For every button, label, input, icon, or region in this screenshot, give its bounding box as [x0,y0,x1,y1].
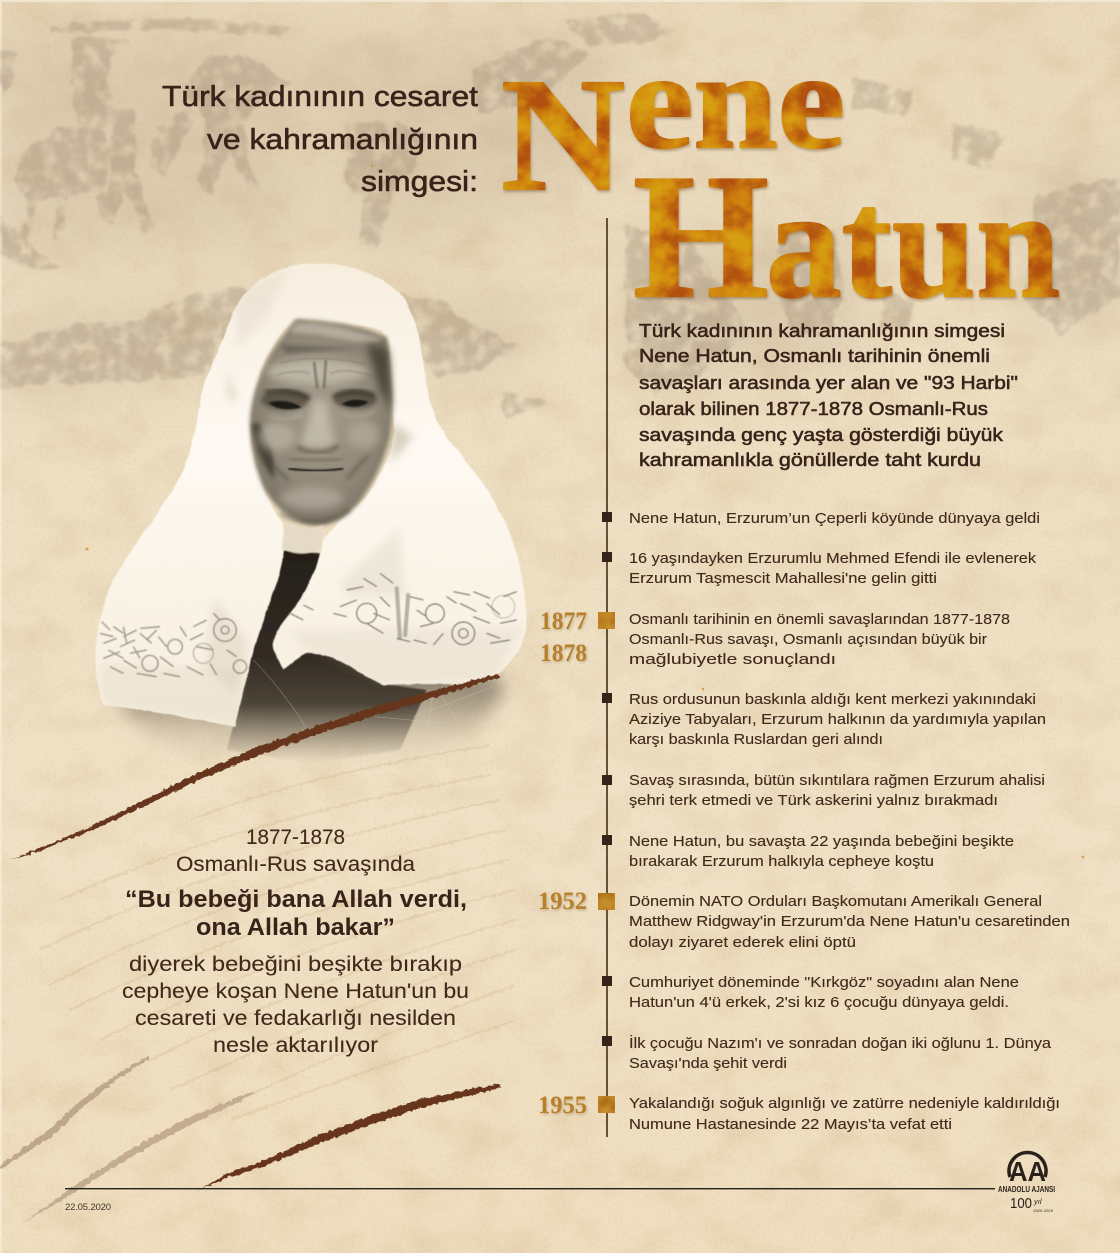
brush stroke: pale left [0,1056,149,1170]
portrait: veil shading [100,270,523,723]
timeline entry: 1952 [538,888,1070,951]
portrait: Nene Hatun [95,263,527,766]
timeline: vertical line [606,218,608,1137]
timeline entry: Aziziye: Aziziye Tabyaları, Erzurum halkının da yardımıyla yapılan [629,711,1046,728]
logo: Anadolu Ajansı: 1920-2020 [1033,1208,1054,1213]
logo: Anadolu Ajansı [998,1152,1055,1213]
portrait: right embroidery [290,573,517,645]
timeline entry: 1955: 1955 [538,1092,587,1119]
timeline entry: marriage: Erzurum Taşmescit Mahallesi'ne gelin gitti [629,570,937,587]
quote block: “Bu bebeği bana Allah verdi, [125,886,467,913]
quote block [122,825,469,1057]
quote block: 1877-1878 [246,825,345,849]
intro paragraph: olarak bilinen 1877-1878 Osmanlı-Rus [639,398,988,419]
heading: intro line [162,81,478,198]
timeline entry: people stayed: şehri terk etmedi ve Türk askerini yalnız bırakmadı [629,792,998,809]
title: Nene Hatun: N [501,46,625,225]
portrait: mouth [288,468,343,471]
heading: intro line: simgesi: [361,166,478,198]
intro paragraph: savaşları arasında yer alan ve "93 Harbi" [639,372,1018,393]
timeline entry: sons: Savaşı'nda şehit verdi [629,1055,787,1072]
heading: intro line: ve kahramanlığının [207,124,478,156]
title: Nene Hatun [501,24,1060,335]
title: Nene Hatun: H [633,137,769,335]
brush stroke: pale middle [22,1091,254,1224]
intro paragraph: savaşında genç yaşta gösterdiği büyük [639,424,1004,445]
timeline entry: to the front: bırakarak Erzurum halkıyla cepheye koştu [629,853,934,870]
timeline entry: 1955: Yakalandığı soğuk algınlığı ve zatürre nedeniyle kaldırıldığı [629,1095,1060,1112]
quote block: cepheye koşan Nene Hatun'un bu [122,979,469,1003]
timeline entry: sons: İlk çocuğu Nazım'ı ve sonradan doğan iki oğlunu 1. Dünya [629,1034,1052,1052]
timeline entry: sons [602,1034,1052,1072]
portrait: collar [282,523,323,554]
logo: Anadolu Ajansı: 100 [1010,1195,1032,1212]
timeline entry: 1877-1878: Osmanlı tarihinin en önemli savaşlarından 1877-1878 [629,611,1010,628]
portrait: nose [300,400,335,448]
date: 22.05.2020 [65,1202,111,1213]
speckles [86,165,1084,858]
timeline entry: Aziziye: Rus ordusunun baskınla aldığı kent merkezi yakınındaki [629,691,1036,708]
timeline entry: 1955: Numune Hastanesinde 22 Mayıs’ta vefat etti [629,1116,952,1133]
timeline entry: 1877-1878: 1877 [540,608,587,635]
heading: intro line: Türk kadınının cesaret [162,81,478,113]
timeline entry: 1877-1878: 1878 [540,640,587,667]
logo: Anadolu Ajansı: yıl [1033,1197,1042,1206]
title: Nene Hatun: ene [626,24,845,177]
timeline entry: marriage [602,550,1036,587]
timeline entry: 1877-1878: mağlubiyetle sonuçlandı [629,651,836,668]
logo: Anadolu Ajansı: AA [1009,1156,1046,1187]
timeline entry: marriage: 16 yaşındayken Erzurumlu Mehmed Efendi ile evlenerek [629,550,1036,567]
timeline entry: 1952: Dönemin NATO Orduları Başkomutanı Amerikalı General [629,893,1042,910]
background: faded battle sketch [0,12,1120,418]
background: soft washes behind the sketch [0,30,1120,400]
portrait: forehead highlight [267,359,367,384]
portrait: cheeks [258,423,295,451]
quote block: ona Allah bakar” [196,914,395,941]
timeline entry: people stayed [602,772,1045,809]
intro paragraph: kahramanlıkla gönüllerde taht kurdu [639,449,981,470]
portrait: body fading into paper [117,665,504,766]
logo: Anadolu Ajansı: ANADOLU AJANSI [998,1184,1055,1194]
timeline entry: people stayed: Savaş sırasında, bütün sıkıntılara rağmen Erzurum ahalisi [629,772,1045,789]
timeline entry: 1952: 1952 [538,888,587,915]
portrait: left embroidery [100,613,247,677]
intro paragraph: Türk kadınının kahramanlığının simgesi [639,320,1005,341]
timeline entry: birth: Nene Hatun, Erzurum’un Çeperli köyünde dünyaya geldi [629,510,1040,527]
timeline entry: Aziziye: karşı baskınla Ruslardan geri alındı [629,731,883,748]
background: faint pen lines behind quote [40,745,515,1120]
timeline entry: surname [602,974,1019,1011]
brush stroke: lower brown [197,1084,500,1191]
timeline entry: surname: Hatun'un 4'ü erkek, 2'si kız 6 çocuğu dünyaya geldi. [629,994,1009,1011]
portrait: eyebrows and eyes [265,391,375,398]
quote block: Osmanlı-Rus savaşında [176,852,415,876]
title: Nene Hatun: atun [766,157,1060,330]
timeline entry: 1877-1878 [540,608,1010,668]
footer rule [65,1188,995,1189]
intro paragraph [639,320,1018,470]
portrait: pale creases on dress [253,660,493,760]
brush stroke: upper brown [10,674,500,860]
timeline entry: Aziziye [602,691,1046,748]
portrait: white veil [95,263,527,727]
portrait: face [250,319,392,526]
quote block: nesle aktarılıyor [213,1033,378,1057]
timeline entry: 1877-1878: Osmanlı-Rus savaşı, Osmanlı açısından büyük bir [629,631,987,648]
timeline entry: to the front: Nene Hatun, bu savaşta 22 yaşında bebeğini beşikte [629,833,1014,850]
intro paragraph: Nene Hatun, Osmanlı tarihinin önemli [639,345,990,366]
timeline entry: 1955 [538,1092,1060,1133]
timeline entry: to the front [602,833,1014,870]
portrait: dark dress [227,550,427,763]
quote block: cesareti ve fedakarlığı nesilden [135,1006,456,1030]
quote block: diyerek bebeğini beşikte bırakıp [129,952,462,976]
portrait: eye sockets [261,390,309,410]
timeline entry: surname: Cumhuriyet döneminde "Kırkgöz" soyadını alan Nene [629,974,1019,991]
timeline entry: 1952: Matthew Ridgway'in Erzurum'da Nene Hatun'u cesaretinden [629,913,1070,930]
timeline entry: 1952: dolayı ziyaret ederek elini öptü [629,934,856,951]
